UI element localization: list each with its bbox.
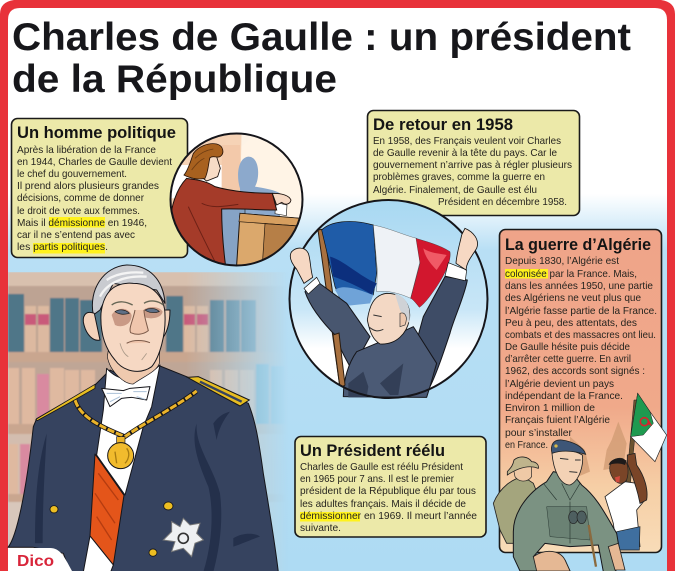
body text: Algérie. Finalement, de Gaulle est élu (373, 185, 537, 196)
body text: des Algériens ne veut plus que (505, 293, 641, 304)
ballot box (237, 213, 300, 265)
body text: dans les années 1950, une partie (505, 281, 653, 292)
body text: d’arrêter cette guerre. En avril (505, 354, 631, 365)
heading: Un homme politique (17, 124, 176, 142)
title (12, 16, 631, 101)
highlight (300, 512, 360, 522)
demonstrator with flag (605, 453, 647, 550)
illustration: de Gaulle raising arms with flag (290, 200, 488, 398)
buttons (50, 502, 173, 556)
shirt (97, 365, 160, 495)
panel: Un homme politique (12, 118, 188, 258)
body text (300, 462, 477, 534)
panel: Un Président réélu (295, 436, 486, 537)
body text: les partis politiques. (17, 242, 108, 253)
panel: De retour en 1958 (368, 110, 580, 216)
grenades (569, 511, 578, 524)
highlights (33, 217, 105, 254)
body text: président de la République élu par tous (300, 486, 476, 497)
body text: suivante. (300, 523, 341, 534)
highlight (505, 269, 548, 278)
body text: Président en décembre 1958. (438, 197, 567, 208)
illustration: Charles de Gaulle portrait (8, 265, 278, 571)
title: de la République (12, 58, 337, 101)
body text: décisions, comme de donner (17, 193, 145, 204)
heading: Un Président réélu (300, 442, 445, 460)
body text: les adultes français. Mais il décide de (300, 499, 466, 510)
neck (107, 340, 160, 384)
body text: le droit de vote aux femmes. (17, 206, 140, 217)
body text (17, 145, 172, 253)
hair (184, 144, 223, 179)
left arm (305, 280, 370, 370)
star decoration (163, 518, 203, 557)
eyes and bruised lids (112, 307, 163, 326)
dust silhouettes (570, 422, 627, 480)
voter shadow (238, 156, 280, 216)
hand (272, 193, 291, 205)
body text: problèmes graves, comme la guerre en (373, 172, 545, 183)
gold medal (108, 437, 134, 469)
body text (373, 136, 572, 208)
body text: Environ 1 million de (505, 403, 595, 414)
head (367, 293, 410, 344)
torso (343, 327, 437, 397)
hands (533, 551, 570, 571)
panel: La guerre d'Algérie (500, 230, 662, 552)
body text: car il ne s’entend pas avec (17, 230, 135, 241)
body text: l’Algérie fasse partie de la France. (505, 306, 657, 317)
ballot (275, 202, 287, 216)
body text: combats et des massacres ont lieu. (505, 330, 656, 341)
title: Charles de Gaulle : un président (12, 16, 631, 59)
ear right (161, 310, 170, 340)
soldier in bush hat (493, 457, 540, 543)
body text: en 1944, Charles de Gaulle devient (17, 157, 172, 168)
heading: La guerre d’Algérie (505, 236, 651, 254)
body text: pour s’installer (505, 428, 573, 439)
body text: de Gaulle revenir à la tête du pays. Car le (373, 148, 557, 159)
face (101, 283, 165, 371)
Dico tab (8, 548, 72, 571)
body text: en France. (505, 440, 548, 451)
body text: De Gaulle hésite puis décide (505, 342, 630, 353)
body text: en 1965 pour 7 ans. Il est le premier (300, 474, 454, 485)
French flag (322, 221, 450, 307)
strap (589, 525, 596, 567)
woman's head (203, 157, 221, 182)
face (552, 450, 583, 485)
woman's coat (171, 178, 277, 267)
skirt (222, 209, 246, 264)
body text: Français fuient l’Algérie (505, 415, 610, 426)
jacket (8, 366, 278, 571)
body text: l’Algérie devient un pays (505, 379, 614, 390)
illustration: bookshelf background (8, 272, 288, 571)
beret (551, 440, 586, 454)
body text: En 1958, des Français veulent voir Charles (373, 136, 561, 147)
body text: Peu à peu, des attentats, des (505, 318, 637, 329)
right epaulette (187, 377, 249, 406)
heading: De retour en 1958 (373, 116, 513, 134)
Dico tab: Dico (17, 553, 54, 570)
flag pole (318, 229, 345, 388)
body text (505, 256, 657, 451)
fists over circle (290, 228, 478, 283)
nose and mouth (127, 310, 150, 343)
bow tie (102, 387, 150, 407)
ear left (83, 312, 100, 340)
gold chain (75, 391, 197, 437)
body text: Après la libération de la France (17, 145, 156, 156)
illustration: woman voting (170, 132, 304, 266)
flag pole lower (333, 333, 345, 388)
body text: Charles de Gaulle est réélu Président (300, 462, 463, 473)
body text: Il prend alors plusieurs grandes (17, 181, 159, 192)
body text: démissionner en 1969. Il meurt l’année (300, 511, 477, 522)
front soldier with beret (513, 440, 625, 571)
right arm (413, 277, 467, 387)
Algerian flag (623, 393, 667, 517)
body text: colonisée par la France. Mais, (505, 269, 637, 280)
body text: Mais il démissionne en 1946, (17, 218, 147, 229)
illustration: Algerian war figures (493, 393, 667, 571)
body text: le chef du gouvernement. (17, 169, 127, 180)
body text: gouvernement n’arrive pas à régler plusieurs (373, 160, 572, 171)
body text: 1962, des accords sont signés : (505, 366, 645, 377)
body text: Depuis 1830, l’Algérie est (505, 256, 619, 267)
wall (172, 134, 242, 206)
left shoulder braid (36, 384, 95, 421)
body text: indépendant de la France. (505, 391, 623, 402)
hair back (92, 265, 165, 315)
sash (90, 454, 124, 565)
